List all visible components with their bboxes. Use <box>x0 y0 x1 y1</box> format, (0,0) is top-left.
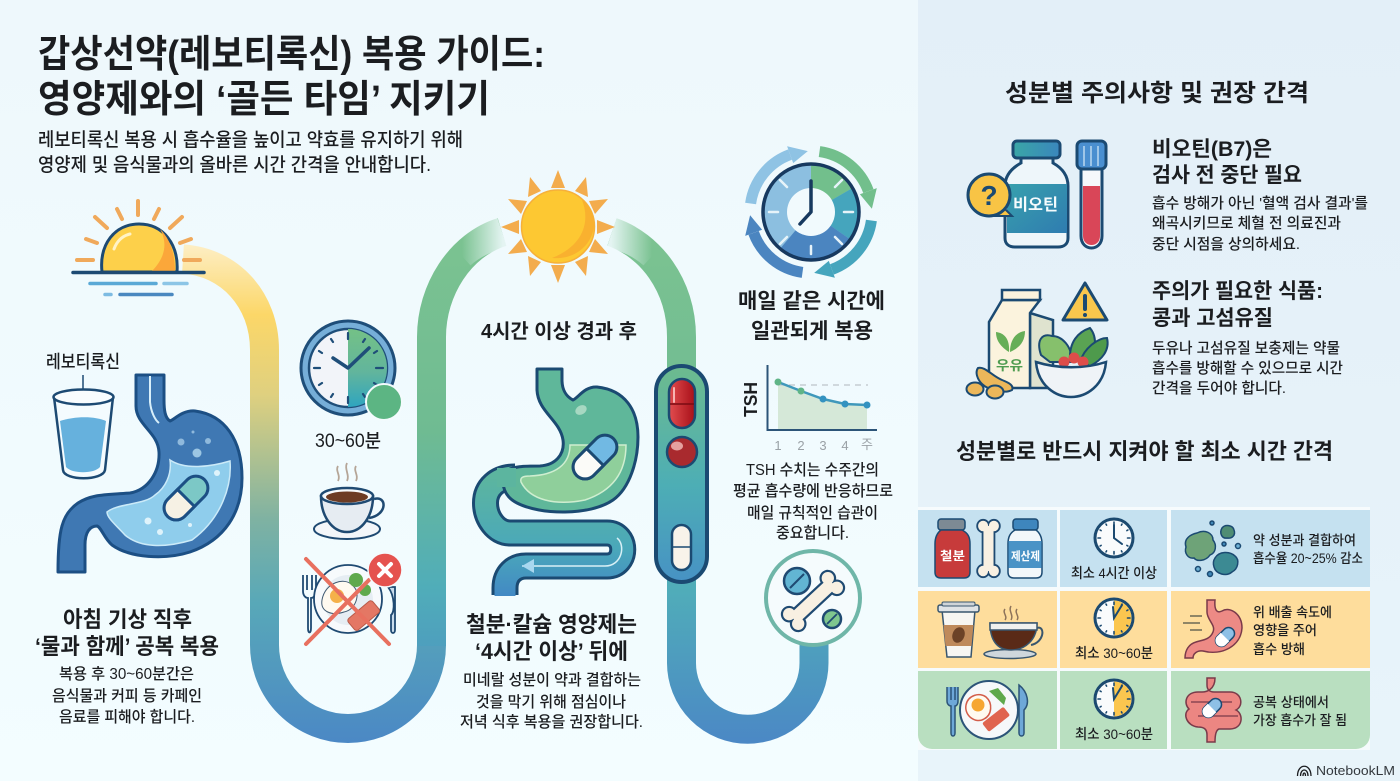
biotin body: 중단 시점을 상의하세요. <box>1152 236 1300 253</box>
subtitle: 레보티록신 복용 시 흡수율을 높이고 약효를 유지하기 위해 <box>38 129 463 151</box>
title: 갑상선약(레보티록신) 복용 가이드: <box>38 34 545 76</box>
biotin body: 왜곡시키므로 체혈 전 의료진과 <box>1152 215 1341 232</box>
row 2: coffee: 위 배출 속도에 <box>1253 605 1332 620</box>
row 3: meals: 최소 30~60분 <box>1075 726 1153 742</box>
food caution body: 흡수를 방해할 수 있으므로 시간 <box>1152 360 1343 377</box>
icon: coffee cup <box>314 463 384 539</box>
icon: pink intestine <box>1186 678 1241 742</box>
icon: bone <box>976 519 1001 578</box>
food caution body: 두유나 고섬유질 보충제는 약물 <box>1152 340 1340 357</box>
step 3 body: 매일 규칙적인 습관이 <box>747 504 878 522</box>
title <box>38 34 545 121</box>
row 3: meals: 가장 흡수가 잘 됨 <box>1253 712 1347 728</box>
step 3 heading <box>738 290 885 343</box>
icon: stomach and intestine (green) <box>486 369 638 596</box>
step 2 heading: 철분·칼슘 영양제는 <box>466 612 637 637</box>
row 2: coffee <box>918 591 1370 668</box>
biotin body: 흡수 방해가 아닌 '혈액 검사 결과'를 <box>1152 195 1368 212</box>
step 3 heading: 일관되게 복용 <box>751 320 873 343</box>
step 1 body <box>52 665 202 726</box>
row 3: meals <box>918 671 1370 749</box>
step 2 heading <box>466 612 637 664</box>
food caution heading <box>1152 280 1323 330</box>
step 2 body <box>460 671 643 731</box>
icon: sunrise <box>73 201 204 294</box>
subtitle <box>38 129 463 176</box>
step 3 body: 평균 흡수량에 반응하므로 <box>733 482 893 500</box>
subtitle: 영양제 및 음식물과의 올바른 시간 간격을 안내합니다. <box>38 154 431 176</box>
food caution heading: 콩과 고섬유질 <box>1152 307 1273 330</box>
red capsule <box>669 379 695 428</box>
title: 영양제와의 ‘골든 타임’ 지키기 <box>38 79 490 121</box>
icon: clock with cycle arrows <box>745 146 877 278</box>
step 2 body: 미네랄 성분이 약과 결합하는 <box>463 671 641 689</box>
icon: iron bottle: 철분 <box>940 549 965 563</box>
background: right panel <box>918 0 1400 781</box>
icon: milk, salad, warning <box>966 283 1108 398</box>
icon: clock 30-60 min <box>301 321 402 420</box>
icon: stomach with capsule (blue) <box>58 375 242 572</box>
biotin body <box>1152 195 1368 253</box>
icon: iron bottle <box>935 519 970 578</box>
chart: TSH trend: 주 <box>861 437 873 452</box>
icon: clock half yellow <box>1095 599 1133 637</box>
icon: glass of water <box>54 375 114 478</box>
row 2: coffee: 영향을 주어 <box>1253 623 1317 638</box>
icon: biotin bottle and blood tube: ? <box>980 180 998 211</box>
icon: espresso cup <box>984 606 1042 658</box>
label: levothyroxine: 레보티록신 <box>46 352 120 372</box>
icon: clock half yellow second <box>1095 680 1133 718</box>
icon: takeaway cup <box>938 602 979 657</box>
biotin heading: 검사 전 중단 필요 <box>1152 164 1302 187</box>
background: left section <box>0 0 918 781</box>
label: 30-60 minutes: 30~60분 <box>315 431 381 452</box>
chart: TSH trend: 3 <box>819 438 827 453</box>
step 1 body: 음식물과 커피 등 카페인 <box>52 687 202 705</box>
step 1 body: 음료를 피해야 합니다. <box>59 708 195 726</box>
step 3 body <box>733 461 893 542</box>
step 1 heading <box>35 607 219 659</box>
icon: meal plate <box>947 681 1027 739</box>
row 1: iron, calcium, antacids: 약 성분과 결합하여 <box>1253 533 1356 548</box>
icon: pink stomach <box>1183 600 1242 658</box>
step 2 heading: ‘4시간 이상’ 뒤에 <box>475 639 628 664</box>
table: minimum intervals <box>918 507 1370 750</box>
white capsule <box>672 525 691 570</box>
icon: antacid bottle: 제산제 <box>1011 549 1040 563</box>
step 3 heading: 매일 같은 시간에 <box>738 290 885 313</box>
step 3 body: TSH 수치는 수주간의 <box>746 461 879 479</box>
timeline ribbon <box>183 232 814 729</box>
logo: NotebookLM: NotebookLM <box>1316 763 1395 778</box>
step 2 body: 것을 막기 위해 점심이나 <box>476 693 626 711</box>
row 1: iron, calcium, antacids <box>918 510 1370 587</box>
food caution body: 간격을 두어야 합니다. <box>1152 380 1286 397</box>
icon: biotin bottle and blood tube: 비오틴 <box>1013 196 1058 214</box>
icon: biotin bottle and blood tube <box>968 141 1106 248</box>
step 1 heading: 아침 기상 직후 <box>63 607 192 632</box>
icon: no food <box>303 553 402 644</box>
icon: mineral clumps <box>1185 521 1240 576</box>
row 3: meals: 공복 상태에서 <box>1253 695 1329 710</box>
row 1: iron, calcium, antacids: 최소 4시간 이상 <box>1071 565 1157 581</box>
chart: TSH trend: 4 <box>841 438 849 453</box>
chart: TSH trend: TSH <box>741 382 761 417</box>
red tablet <box>667 437 697 467</box>
food caution body <box>1152 340 1343 397</box>
icon: clock 4 hours <box>1095 519 1133 557</box>
right panel heading: 성분별 주의사항 및 권장 간격 <box>1005 80 1309 107</box>
row 2: coffee: 최소 30~60분 <box>1075 645 1153 661</box>
biotin heading: 비오틴(B7)은 <box>1152 138 1272 161</box>
step 1 body: 복용 후 30~60분간은 <box>59 665 194 683</box>
step 1 heading: ‘물과 함께’ 공복 복용 <box>35 634 219 659</box>
chart: TSH trend <box>741 365 877 453</box>
step 3 body: 중요합니다. <box>776 524 849 542</box>
row 2: coffee: 흡수 방해 <box>1253 641 1305 657</box>
biotin heading <box>1152 138 1302 187</box>
label: after 4 hours: 4시간 이상 경과 후 <box>481 320 637 343</box>
icon: milk, salad, warning: 우유 <box>996 358 1023 373</box>
chart: TSH trend: 1 <box>774 438 782 453</box>
pill tower <box>656 366 707 582</box>
icon: antacid bottle <box>1008 519 1042 578</box>
food caution heading: 주의가 필요한 식품: <box>1152 280 1323 303</box>
icon: bone and pills circle <box>766 551 860 645</box>
row 1: iron, calcium, antacids: 흡수율 20~25% 감소 <box>1253 550 1363 566</box>
step 2 body: 저녁 식후 복용을 권장합니다. <box>460 713 643 731</box>
icon: midday sun <box>501 170 615 283</box>
table heading: 성분별로 반드시 지켜야 할 최소 시간 간격 <box>956 439 1333 464</box>
chart: TSH trend: 2 <box>797 438 805 453</box>
